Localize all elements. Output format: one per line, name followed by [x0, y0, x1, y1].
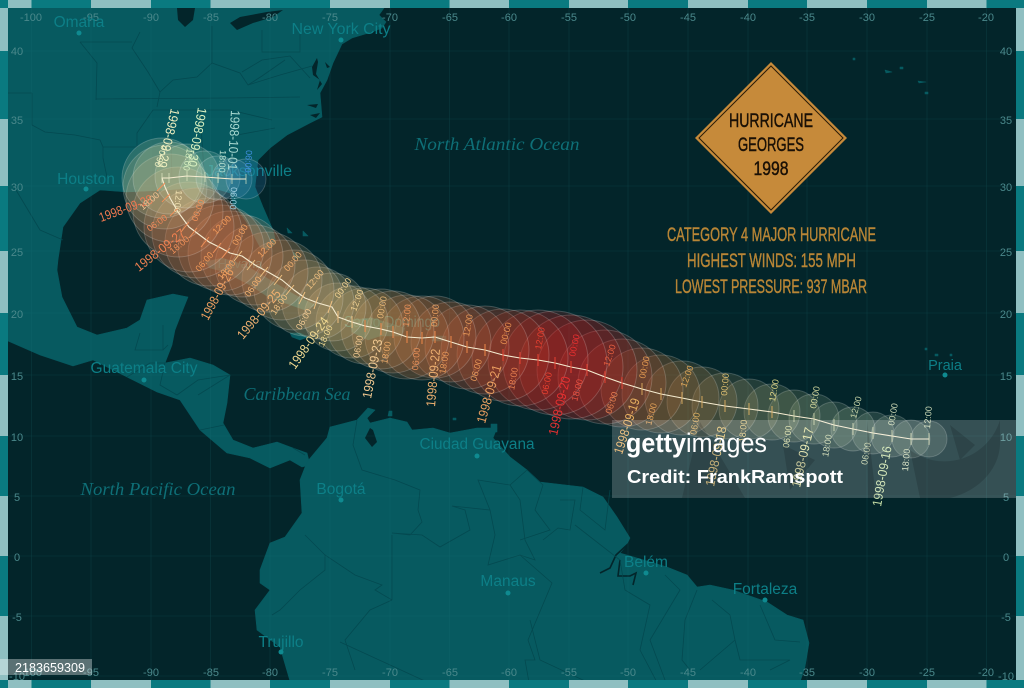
watermark credit text: Credit: FrankRamspott — [627, 466, 843, 487]
longitude and latitude axis labels: 0 — [14, 552, 20, 564]
longitude and latitude axis labels: -10 — [9, 671, 25, 683]
six-hour time labels: 06:00 — [688, 412, 702, 436]
longitude and latitude axis labels: -80 — [262, 667, 278, 679]
city labels and markers: Houston — [57, 171, 115, 188]
six-hour time labels: 18:00 — [181, 148, 195, 172]
longitude and latitude axis labels: -40 — [740, 667, 756, 679]
longitude and latitude axis labels: 10 — [1000, 432, 1012, 444]
six-hour time labels: 06:00 — [243, 150, 254, 173]
six-hour time labels: 06:00 — [468, 358, 484, 382]
date labels: 1998-09-21 — [473, 363, 504, 425]
longitude and latitude axis labels: -90 — [143, 667, 159, 679]
longitude and latitude axis labels: -30 — [859, 12, 875, 24]
hurricane warning sign — [695, 62, 847, 214]
longitude and latitude axis labels: -70 — [382, 12, 398, 24]
political borders — [8, 26, 800, 688]
longitude and latitude axis labels: 20 — [11, 309, 23, 321]
six-hour time labels: 12:00 — [348, 288, 366, 313]
longitude and latitude axis labels: -60 — [501, 667, 517, 679]
image id tag: 2183659309 — [15, 661, 85, 675]
hurricane statistics text: CATEGORY 4 MAJOR HURRICANE — [667, 225, 876, 246]
longitude and latitude axis labels: -20 — [978, 12, 994, 24]
six-hour time labels: 18:00 — [643, 402, 659, 426]
longitude and latitude axis labels: 15 — [11, 371, 23, 383]
hurricane statistics text: LOWEST PRESSURE: 937 MBAR — [675, 277, 867, 298]
date labels: 1998-09-25 — [234, 286, 284, 342]
longitude and latitude axis labels: 40 — [1000, 46, 1012, 58]
date labels: 1998-09-29 — [155, 107, 183, 169]
date labels: 1998-09-17 — [788, 426, 817, 489]
six-hour time labels: 18:00 — [138, 190, 161, 212]
Lake Michigan — [177, 8, 195, 27]
six-hour time labels: 06:00 — [145, 212, 169, 234]
date labels: 1998-09-16 — [869, 445, 895, 508]
six-hour time labels: 18:00 — [215, 258, 238, 282]
six-hour time labels: 18:00 — [737, 419, 749, 443]
ocean names: North Atlantic Ocean — [413, 134, 580, 154]
longitude and latitude axis labels: -25 — [919, 12, 935, 24]
city labels and markers: Ciudad Guayana — [420, 436, 535, 453]
longitude and latitude axis labels: -25 — [919, 667, 935, 679]
longitude and latitude axis labels: -45 — [680, 667, 696, 679]
longitude and latitude axis labels: 35 — [1000, 115, 1012, 127]
longitude and latitude axis labels: 30 — [1000, 182, 1012, 194]
six-hour time labels: 00:00 — [808, 385, 822, 409]
six-hour time labels: 00:00 — [189, 198, 207, 223]
track polyline — [162, 176, 929, 439]
city labels and markers: Bogotá — [316, 481, 366, 498]
longitude and latitude axis labels: -65 — [442, 12, 458, 24]
longitude and latitude axis labels: -50 — [620, 12, 636, 24]
six-hour time labels: 18:00 — [269, 292, 290, 317]
longitude and latitude axis labels: 5 — [1003, 492, 1009, 504]
Lake Maracaibo — [365, 428, 377, 447]
longitude and latitude axis labels: -55 — [561, 667, 577, 679]
watermark dark shapes — [682, 420, 1000, 498]
longitude and latitude axis labels: 0 — [1003, 552, 1009, 564]
city labels and markers: Manaus — [480, 573, 536, 590]
six-hour time labels: 00:00 — [230, 222, 250, 247]
date labels: 1998-09-30 — [185, 106, 210, 168]
six-hour time labels: 00:00 — [375, 295, 389, 319]
six-hour time labels: 00:00 — [886, 402, 900, 426]
longitude and latitude axis labels: -100 — [20, 667, 42, 679]
six-hour time labels: 12:00 — [922, 406, 934, 429]
hurricane statistics text: HIGHEST WINDS: 155 MPH — [687, 251, 856, 272]
image id tag — [0, 659, 92, 675]
watermark backdrop — [612, 420, 1016, 498]
South America — [255, 408, 809, 688]
six-hour time labels: 12:00 — [172, 190, 184, 213]
six-hour time labels — [138, 144, 934, 472]
longitude and latitude axis labels: -55 — [561, 12, 577, 24]
sign text: HURRICANE — [729, 110, 813, 132]
Amazon mouth channels — [600, 544, 636, 585]
longitude and latitude axis labels: -70 — [382, 667, 398, 679]
six-hour time labels: 18:00 — [379, 341, 393, 365]
six-hour time labels: 12:00 — [848, 395, 864, 420]
six-hour time labels: 18:00 — [569, 378, 585, 402]
ocean names: North Pacific Ocean — [79, 479, 236, 499]
sign text — [729, 110, 813, 180]
city labels and markers: Belém — [624, 554, 668, 571]
six-hour time labels: 12:00 — [210, 213, 233, 236]
city labels and markers: Praia — [928, 358, 963, 374]
six-hour time labels: 06:00 — [193, 250, 216, 274]
longitude and latitude axis labels: -90 — [143, 12, 159, 24]
longitude and latitude axis labels: 30 — [11, 182, 23, 194]
six-hour time labels: 00:00 — [498, 321, 514, 346]
sign text: 1998 — [754, 158, 788, 180]
six-hour time labels: 12:00 — [533, 326, 547, 350]
longitude and latitude axis labels: 25 — [1000, 247, 1012, 259]
city labels and markers: Havana — [218, 256, 263, 271]
longitude and latitude axis labels: -10 — [998, 671, 1014, 683]
six-hour time labels: 06:00 — [410, 347, 422, 371]
six-hour time labels: 00:00 — [282, 250, 304, 273]
longitude and latitude axis labels: -45 — [680, 12, 696, 24]
six-hour time labels: 18:00 — [316, 324, 335, 348]
six-hour time labels: 00:00 — [332, 276, 354, 300]
six-hour time labels: 12:00 — [767, 378, 781, 402]
ocean names — [79, 134, 580, 499]
small islands — [287, 58, 952, 432]
lakes and inlets — [177, 8, 377, 447]
city labels and markers: New York City — [292, 21, 391, 38]
longitude and latitude axis labels: -65 — [442, 667, 458, 679]
six-hour time labels: 06:00 — [603, 391, 620, 415]
longitude and latitude axis labels: -95 — [83, 12, 99, 24]
six-hour time labels: 18:00 — [506, 367, 520, 391]
Lake Erie — [230, 10, 283, 30]
six-hour time labels: 06:00 — [152, 144, 170, 169]
Hispaniola — [350, 318, 405, 340]
longitude and latitude axis labels: -60 — [501, 12, 517, 24]
longitude and latitude axis labels: -85 — [203, 12, 219, 24]
longitude and latitude axis labels: -35 — [799, 12, 815, 24]
six-hour time labels: 06:00 — [539, 371, 554, 395]
ocean names: Caribbean Sea — [244, 384, 350, 404]
date labels: 1998-09-26 — [197, 266, 237, 322]
six-hour time labels: 12:00 — [401, 304, 413, 327]
longitude and latitude axis labels: 10 — [11, 432, 23, 444]
longitude and latitude axis labels: 5 — [14, 492, 20, 504]
six-hour time labels: 18:00 — [437, 351, 451, 375]
six-hour time labels: 06:00 — [294, 307, 314, 332]
six-hour tick marks — [794, 410, 929, 445]
longitude and latitude axis labels: -50 — [620, 667, 636, 679]
longitude and latitude axis labels: 20 — [1000, 309, 1012, 321]
six-hour time labels: 12:00 — [304, 268, 326, 291]
six-hour time labels: 06:00 — [228, 187, 239, 210]
hurricane track line — [157, 171, 929, 445]
date labels: 1998-09-18 — [702, 425, 730, 488]
Cuba — [205, 258, 315, 310]
date labels: 1998-09-23 — [359, 338, 385, 400]
longitude and latitude axis labels: 40 — [11, 46, 23, 58]
date labels: 1998-09-28 — [97, 192, 155, 225]
date labels — [97, 106, 895, 508]
date labels: 1998-10-01 — [225, 110, 243, 171]
longitude and latitude axis labels: -5 — [1001, 612, 1011, 624]
date labels: 1998-09-20 — [545, 375, 573, 437]
longitude and latitude axis labels: -40 — [740, 12, 756, 24]
city labels and markers: Guatemala City — [90, 360, 198, 377]
hurricane wind radius circles — [122, 138, 947, 458]
city labels and markers: Omaha — [54, 14, 105, 31]
longitude and latitude axis labels: -30 — [859, 667, 875, 679]
city labels and markers: Fortaleza — [733, 581, 798, 598]
longitude and latitude axis labels: -35 — [799, 667, 815, 679]
six-hour time labels: 18:00 — [217, 150, 228, 173]
longitude and latitude axis labels: 25 — [11, 247, 23, 259]
longitude and latitude axis labels: 15 — [1000, 371, 1012, 383]
North and Central America — [8, 8, 386, 468]
six-hour time labels: 06:00 — [243, 274, 264, 299]
six-hour time labels: 18:00 — [820, 434, 834, 458]
longitude and latitude axis labels: -100 — [20, 12, 42, 24]
watermark banner — [612, 420, 1016, 498]
longitude and latitude axis labels: -80 — [262, 12, 278, 24]
city labels and markers: Jacksonville — [206, 163, 292, 180]
six-hour time labels: 00:00 — [637, 355, 652, 379]
sign diamond — [695, 62, 847, 214]
six-hour time labels: 12:00 — [461, 313, 475, 337]
six-hour time labels: 00:00 — [719, 373, 731, 396]
six-hour time labels: 12:00 — [601, 343, 618, 368]
longitude and latitude axis labels: -95 — [83, 667, 99, 679]
six-hour time labels: 00:00 — [567, 333, 582, 357]
sign inner border — [699, 66, 843, 210]
longitude and latitude axis labels: -20 — [978, 667, 994, 679]
date labels: 1998-09-27 — [132, 226, 188, 274]
longitude and latitude axis labels: -5 — [12, 612, 22, 624]
sign text: GEORGES — [738, 134, 804, 156]
Jamaica — [290, 333, 308, 340]
date labels: 1998-09-24 — [285, 314, 332, 372]
six-hour time labels: 06:00 — [351, 335, 365, 359]
watermark logo text: gettyimages — [626, 428, 767, 458]
longitude and latitude axis labels: -75 — [322, 12, 338, 24]
six-hour time labels: 06:00 — [859, 442, 873, 466]
Puerto Rico — [432, 336, 446, 341]
six-hour time labels: 12:00 — [255, 236, 278, 259]
six-hour time labels: 18:00 — [168, 234, 191, 256]
longitude and latitude axis labels: 35 — [11, 115, 23, 127]
six-hour time labels: 06:00 — [781, 425, 794, 449]
six-hour time labels: 18:00 — [900, 448, 912, 472]
hurricane statistics text — [667, 225, 876, 298]
date labels: 1998-09-19 — [611, 396, 643, 456]
six-hour time labels: 12:00 — [678, 364, 696, 389]
Chesapeake and Delaware bays — [307, 58, 330, 118]
longitude and latitude axis labels: -75 — [322, 667, 338, 679]
date labels: 1998-09-22 — [423, 348, 443, 407]
six-hour time labels: 00:00 — [429, 304, 441, 327]
longitude and latitude axis labels: -85 — [203, 667, 219, 679]
city labels and markers: Santo Domingo — [344, 314, 440, 331]
city labels and markers: Trujillo — [258, 634, 304, 651]
